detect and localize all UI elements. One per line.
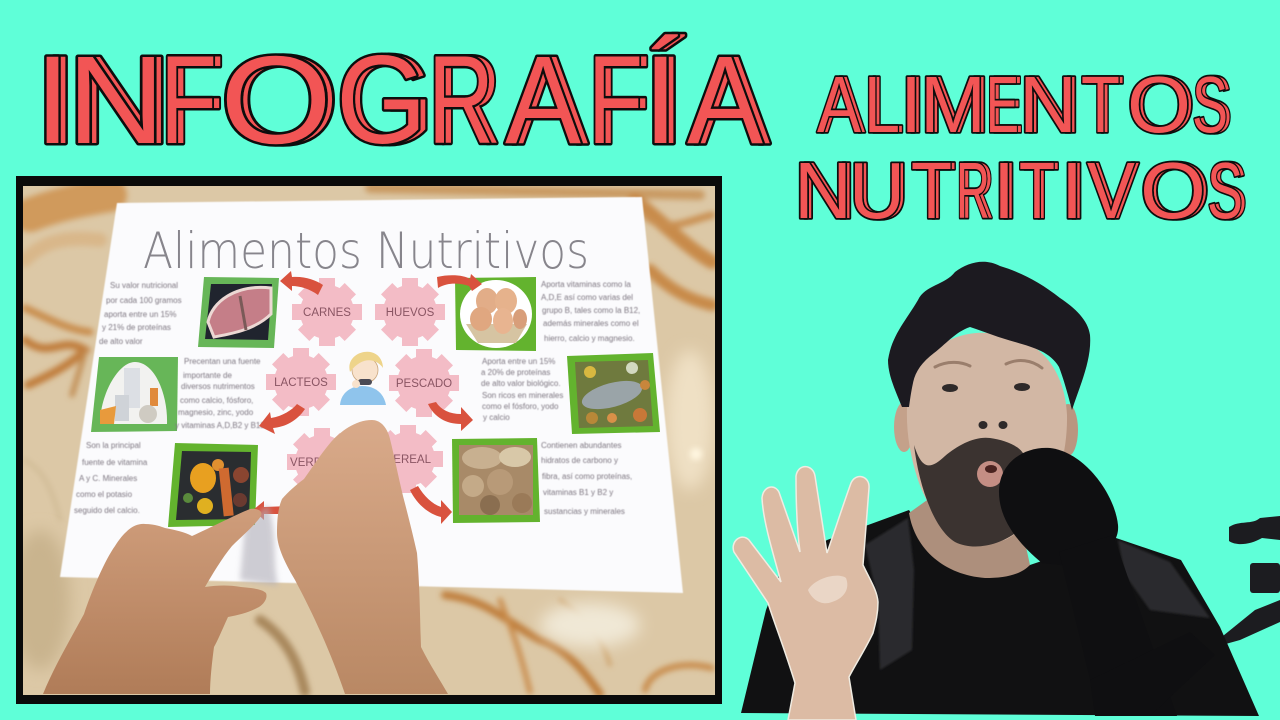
- photo panel: paper infographic on marble table: [10, 176, 722, 704]
- image: vegetables: [168, 443, 258, 527]
- subtitle: NUTRITIVOS: T: [911, 146, 952, 235]
- title: INFOGRAFÍA: A: [505, 31, 582, 170]
- gear: PESCADO: [389, 349, 459, 417]
- title: INFOGRAFÍA: G: [336, 31, 427, 170]
- title: INFOGRAFÍA: O: [220, 31, 332, 170]
- gear: CARNES: [292, 278, 362, 346]
- text block: verduras: fuente de vitamina: [82, 458, 148, 467]
- subtitle: ALIMENTOS: N: [1019, 60, 1077, 149]
- gear: CEREAL: [373, 425, 443, 493]
- text block: huevos: hierro, calcio y magnesio.: [544, 334, 635, 343]
- gear: PESCADO: PESCADO: [396, 378, 452, 390]
- text block: lacteos: magnesio, zinc, yodo: [178, 408, 254, 417]
- eyes and nose: [942, 383, 1030, 429]
- text block: cereales: Contienen abundantes: [541, 441, 622, 450]
- arrow: lacteos: [259, 404, 305, 434]
- text block: pescado: Son ricos en minerales: [482, 391, 563, 400]
- hand: right over gears: [277, 420, 448, 694]
- subtitle: ALIMENTOS: I: [900, 60, 922, 149]
- text block: verduras: seguido del calcio.: [74, 506, 140, 515]
- text block: pescado: y calcio: [483, 413, 510, 422]
- text block: lacteos: y vitaminas A,D,B2 y B12: [175, 421, 265, 430]
- subtitle: NUTRITIVOS: I: [1061, 146, 1083, 235]
- gear: LACTEOS: [266, 348, 336, 416]
- microphone: [999, 448, 1215, 716]
- title: INFOGRAFÍA: A: [687, 31, 764, 170]
- hand: left pointing: [43, 509, 267, 694]
- folded thumb: [808, 576, 847, 603]
- text block: lacteos: importante de: [183, 371, 232, 380]
- subtitle: ALIMENTOS: T: [1081, 60, 1120, 149]
- arrow: carnes: [280, 271, 323, 295]
- hair: [888, 262, 1090, 410]
- subtitle: NUTRITIVOS: O: [1140, 146, 1206, 235]
- eyebrows: [935, 361, 1042, 368]
- mouth: [977, 461, 1003, 487]
- hand shadow on paper: [240, 505, 278, 586]
- image: meat: [198, 277, 279, 348]
- subtitle: NUTRITIVOS: R: [956, 146, 990, 235]
- title: INFOGRAFÍA: N: [67, 31, 165, 170]
- text block: verduras: como el potasio: [76, 490, 133, 499]
- text block: pescado: Aporta entre un 15%: [482, 357, 555, 366]
- subtitle: ALIMENTOS: S: [1192, 60, 1228, 149]
- paper heading: Alimentos Nutritivos: Alimentos Nutritivos: [143, 222, 589, 280]
- title: INFOGRAFÍA: F: [160, 31, 217, 170]
- text block: lacteos: como calcio, fósforo,: [180, 396, 253, 405]
- beard: [914, 438, 1025, 547]
- text block: pescado: como el fósforo, yodo: [482, 402, 559, 411]
- title: INFOGRAFÍA: R: [428, 31, 494, 170]
- title: INFOGRAFÍA: F: [588, 31, 643, 170]
- text block: cereales: hidratos de carbono y: [541, 456, 618, 465]
- face: [907, 333, 1067, 542]
- arrow: verduras: [253, 501, 290, 520]
- arrow: pescado: [428, 402, 473, 431]
- subtitle: ALIMENTOS: O: [1127, 60, 1191, 149]
- text block: cereales: fibra, así como proteínas,: [542, 472, 632, 481]
- arrow: huevos: [437, 274, 482, 291]
- text block: huevos: grupo B, tales como la B12,: [542, 306, 640, 315]
- text block: huevos: además minerales como el: [543, 319, 639, 328]
- text block: cereales: sustancias y minerales: [544, 507, 625, 516]
- ears: [894, 402, 914, 452]
- text block: carnes: de alto valor: [99, 337, 143, 346]
- gear: HUEVOS: [375, 278, 445, 346]
- subtitle: NUTRITIVOS: T: [1019, 146, 1055, 235]
- title: INFOGRAFÍA: I: [35, 31, 70, 170]
- gear: VERDURAS: VERDURAS: [290, 457, 354, 469]
- text block: lacteos: Precentan una fuente: [184, 357, 261, 366]
- gear: LACTEOS: LACTEOS: [274, 377, 328, 389]
- text block: lacteos: diversos nutrimentos: [181, 382, 255, 391]
- text block: huevos: A,D,E así como varias del: [541, 293, 633, 302]
- subtitle: ALIMENTOS: M: [920, 60, 986, 149]
- text block: verduras: A y C. Minerales: [79, 474, 137, 483]
- text block: cereales: vitaminas B1 y B2 y: [543, 488, 613, 497]
- presenter: man with microphone: [733, 262, 1280, 720]
- subtitle: NUTRITIVOS: U: [849, 146, 905, 235]
- gear: CARNES: CARNES: [303, 307, 351, 319]
- text block: carnes: por cada 100 gramos: [106, 296, 182, 305]
- text block: huevos: Aporta vitaminas como la: [541, 280, 631, 289]
- jacket sleeve texture: [865, 518, 1210, 670]
- image: cereals: [452, 438, 540, 523]
- marble background: [10, 186, 715, 695]
- text block: carnes: aporta entre un 15%: [104, 310, 176, 319]
- illustration: child eating: [340, 352, 386, 405]
- subtitle: NUTRITIVOS: V: [1087, 146, 1136, 235]
- arrow: cereal: [410, 486, 452, 524]
- gear: HUEVOS: HUEVOS: [386, 307, 435, 319]
- gear: CEREAL: CEREAL: [385, 454, 432, 466]
- subtitle: NUTRITIVOS: I: [993, 146, 1015, 235]
- image: dairy: [91, 357, 178, 432]
- subtitle: NUTRITIVOS: N: [794, 146, 852, 235]
- text block: pescado: a 20% de proteínas: [481, 368, 550, 377]
- gear: VERDURAS: [287, 428, 357, 496]
- text block: carnes: Su valor nutricional: [110, 281, 178, 290]
- title: INFOGRAFÍA: Í: [643, 31, 678, 170]
- subtitle: NUTRITIVOS: S: [1207, 146, 1243, 235]
- subtitle: ALIMENTOS: A: [817, 60, 862, 149]
- text block: pescado: de alto valor biológico.: [481, 379, 561, 388]
- hand showing four fingers: [733, 467, 878, 720]
- torso with black jacket: [741, 510, 1259, 716]
- image: fish: [567, 353, 660, 434]
- text block: verduras: Son la principal: [86, 441, 141, 450]
- photo frame: [16, 176, 722, 704]
- image: eggs: [455, 277, 536, 351]
- neck: [909, 498, 1030, 578]
- mic stand arm: [1218, 516, 1280, 645]
- subtitle: ALIMENTOS: L: [864, 60, 900, 149]
- paper sheet: [60, 197, 683, 593]
- subtitle: ALIMENTOS: E: [986, 60, 1019, 149]
- text block: carnes: y 21% de proteínas: [102, 323, 171, 332]
